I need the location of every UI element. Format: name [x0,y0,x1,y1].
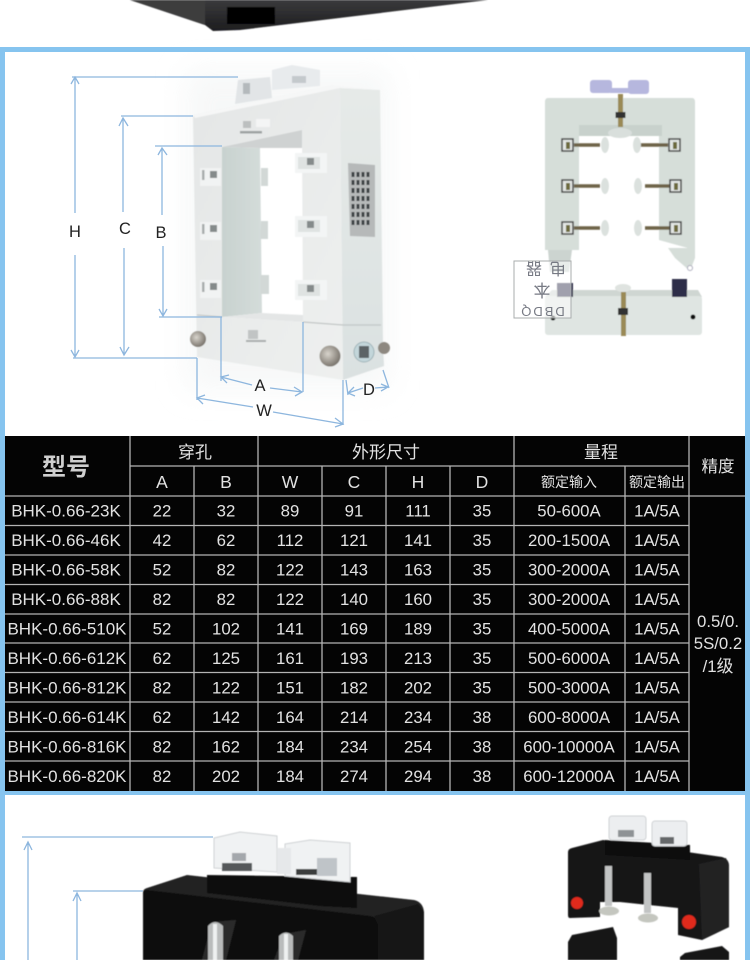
row 820K: 38 [473,767,491,786]
table header: 穿孔 [178,443,212,462]
right side face [340,88,384,380]
black exploded photo, bottom right [568,816,729,960]
row 820K: 202 [212,767,240,786]
table header: D [476,472,488,492]
row 820K: BHK-0.66-820K [7,767,127,786]
row 612K: 161 [276,649,304,668]
row 23K: 50-600A [537,502,602,520]
row 612K: 213 [404,649,432,668]
row 614K: 62 [153,708,171,727]
row 510K: 35 [473,620,491,638]
dimension B [155,146,222,317]
row 614K: BHK-0.66-614K [7,708,127,727]
specification table [5,436,745,791]
table header: 型号 [42,454,90,481]
row 812K: BHK-0.66-812K [7,678,127,698]
row 58K: 1A/5A [634,560,681,580]
table header: 额定输入 [541,474,597,490]
row 58K: 163 [404,560,432,580]
terminal block [605,840,690,860]
row 614K: 1A/5A [634,708,681,727]
row 816K [7,738,681,756]
row 510K: 1A/5A [634,620,681,638]
row 46K: 35 [473,531,491,550]
row 816K: 600-10000A [523,738,616,756]
inner tabs [261,168,269,294]
row 614K: 38 [473,708,491,727]
row 614K: 214 [340,708,368,727]
row 58K: 300-2000A [528,560,611,580]
row 88K: 160 [404,590,432,609]
row 58K: BHK-0.66-58K [11,560,121,580]
row 510K [7,620,681,638]
row 58K: 122 [276,560,304,580]
table header: W [282,472,299,492]
row 614K: 142 [212,708,240,727]
detached clips [568,927,729,960]
table header: C [348,472,360,492]
dimension A [221,317,303,396]
housing [568,840,729,940]
dimension W [197,358,343,427]
row 612K: 500-6000A [528,649,611,668]
row 23K: 89 [281,502,299,520]
soft photo background [185,70,390,390]
row 820K: 82 [153,767,171,786]
row 816K: 1A/5A [634,738,681,756]
row 58K: 35 [473,560,491,580]
top product photo: black housing bottom [130,0,488,31]
table header: 外形尺寸 [352,443,420,462]
row 23K: 35 [473,502,491,520]
row 612K: 1A/5A [634,649,681,668]
row 614K: 600-8000A [528,708,611,727]
lower core [545,279,702,336]
row 510K: 141 [276,620,304,638]
lower clip [246,330,266,342]
table header: 量程 [584,443,618,462]
covers [609,816,687,846]
main product photo: white split-core transformer [190,65,390,380]
dimension A: A [254,377,266,395]
row 510K: 189 [404,620,432,638]
black transformer photo, bottom left [143,832,424,960]
row 88K [11,590,681,609]
red indicators [571,897,696,929]
row 812K: 35 [473,678,491,698]
row 23K: 32 [217,502,235,520]
row 820K: 1A/5A [634,767,681,786]
row 58K: 52 [153,560,171,580]
dimension H: H [69,223,81,241]
row 820K: 600-12000A [523,767,616,786]
row 816K: BHK-0.66-816K [7,738,127,756]
upper U-shaped core [545,98,695,250]
row 46K: 1A/5A [634,531,681,550]
row 46K: 141 [404,531,432,550]
row 58K: 143 [340,560,368,580]
accuracy cell: 0.5/0. [697,612,739,631]
front face [193,85,343,380]
mirrored watermark: 本 [534,280,550,299]
row 812K: 82 [153,678,171,698]
row 88K: 82 [217,590,235,609]
row 820K: 294 [404,767,432,786]
table header: B [220,472,232,492]
row 816K: 162 [212,738,240,756]
row 88K: 1A/5A [634,590,681,609]
terminal cover [590,80,649,94]
bolts [190,331,390,366]
accuracy cell [694,612,742,676]
row 820K: 274 [340,767,368,786]
table header: A [156,472,168,492]
row 614K: 164 [276,708,304,727]
row 612K: 125 [212,649,240,668]
row 612K: BHK-0.66-612K [7,649,127,668]
row 812K: 151 [276,678,304,698]
row 816K: 234 [340,738,368,756]
row 816K: 82 [153,738,171,756]
row 816K: 38 [473,738,491,756]
terminal covers [235,65,320,104]
top clip [240,119,270,134]
row 820K: 184 [276,767,304,786]
row 23K [11,502,681,520]
terminal base [207,875,357,908]
row 46K: BHK-0.66-46K [11,531,121,550]
row 46K: 200-1500A [528,531,611,550]
dimension D: D [363,381,375,399]
row 46K: 112 [277,531,303,550]
table header: 额定输出 [629,474,685,490]
row 812K: 500-3000A [528,678,611,698]
row 23K: 91 [345,502,363,520]
row 510K: BHK-0.66-510K [7,620,127,638]
row 612K: 35 [473,649,491,668]
row 88K: 300-2000A [528,590,611,609]
table header [42,443,734,492]
row 88K: 35 [473,590,491,609]
row 58K: 82 [217,560,235,580]
row 23K: 22 [153,502,171,520]
center screw [608,94,632,138]
row 46K: 62 [217,531,235,550]
nameplate label [348,163,375,237]
dimension lines, bottom photo [22,837,213,960]
split line [197,315,381,325]
dimension C: C [119,220,131,238]
mirrored watermark: 电器 [518,259,566,277]
glass covers [214,832,350,882]
row 612K: 62 [153,649,171,668]
row 614K: 234 [404,708,432,727]
screws and washers [599,866,658,922]
row 88K: 122 [276,590,304,609]
exploded product photo, top right [545,80,702,336]
row 510K: 400-5000A [528,620,611,638]
row 812K: 202 [404,678,432,698]
mirrored watermark: DBDQ [519,304,565,319]
horizontal bolts [562,137,681,236]
mirrored watermark [514,259,571,319]
row 612K: 193 [340,649,368,668]
row 510K: 102 [212,620,240,638]
accuracy cell: 5S/0.2 [694,634,742,653]
dimension H [69,77,238,358]
row 88K: 82 [153,590,171,609]
row 23K: 1A/5A [634,502,681,520]
row 614K [7,708,681,727]
row 812K: 122 [212,678,240,698]
dimension D [346,370,389,399]
row 88K: BHK-0.66-88K [11,590,121,609]
row 510K: 52 [153,620,171,638]
right clips [295,153,327,300]
table header: 精度 [702,457,734,476]
dimension C [119,116,193,355]
window opening [222,130,303,322]
table grid [5,436,745,791]
row 812K [7,678,681,698]
accuracy cell: /1级 [703,657,734,676]
row 23K: BHK-0.66-23K [11,502,121,520]
row 612K [7,649,681,668]
table header: H [412,472,424,492]
row 46K: 121 [340,531,368,550]
row 88K: 140 [340,590,368,609]
row 58K [11,560,681,580]
row 812K: 182 [340,678,368,698]
dimension B: B [155,224,167,242]
row 23K: 111 [405,502,431,520]
qr sticker [354,342,374,362]
screws [202,920,306,960]
row 816K: 184 [276,738,304,756]
row 510K: 169 [340,620,368,638]
top face highlight [193,85,380,118]
left clips [200,168,221,298]
row 812K: 1A/5A [634,678,681,698]
housing [143,875,424,960]
row 46K [11,531,681,550]
row 816K: 254 [404,738,432,756]
dimension W: W [256,402,272,420]
row 820K [7,767,681,786]
row 46K: 42 [153,531,171,550]
